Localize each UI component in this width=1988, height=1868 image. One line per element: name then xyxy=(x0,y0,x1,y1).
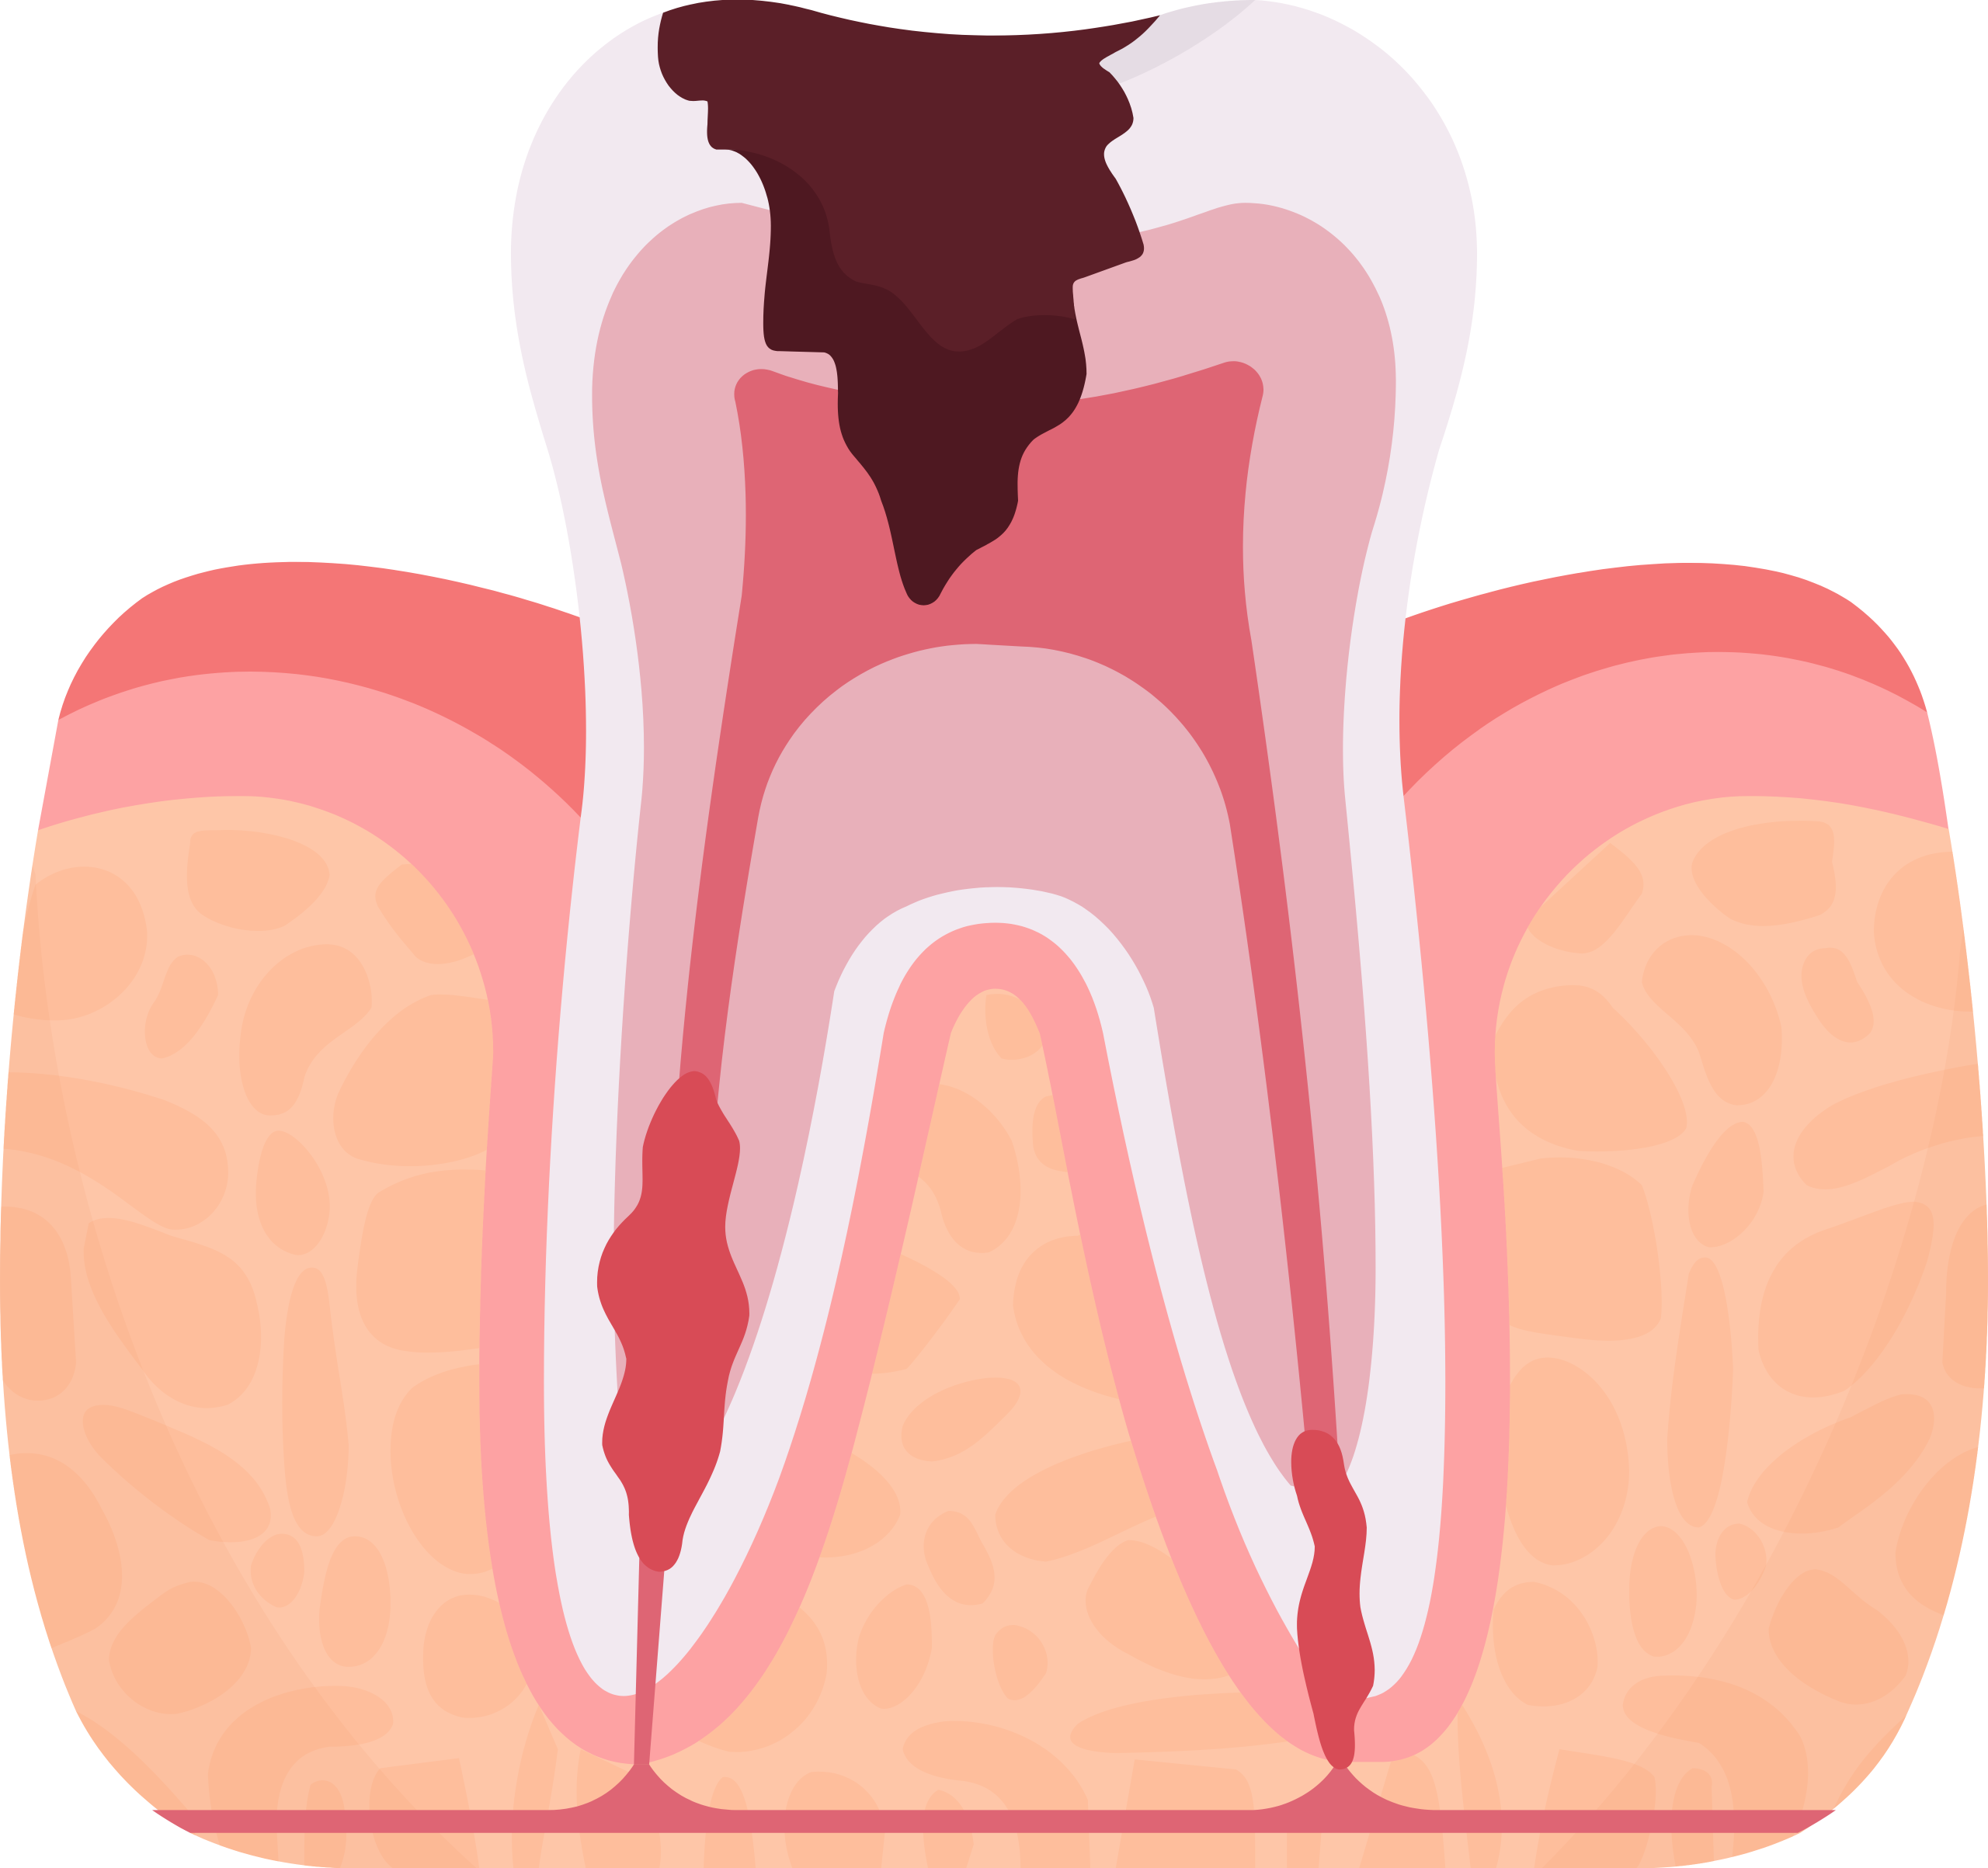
decay: upper cavity xyxy=(658,0,1160,352)
marrow blobs right xyxy=(1359,1749,1445,1868)
decay: deep dark layer xyxy=(725,150,1086,606)
gum: pink tissue and root sheath xyxy=(38,652,1948,1775)
jaw bone with marrow pattern xyxy=(0,761,1988,1868)
abscess: right root xyxy=(1291,1430,1375,1769)
enamel shadow highlight xyxy=(1084,0,1255,89)
abscess: left root xyxy=(597,1071,749,1571)
nerve canal to root tip xyxy=(634,1521,668,1765)
pulp chamber and root canals xyxy=(678,361,1337,1445)
tooth enamel and cementum xyxy=(511,0,1477,1705)
marrow blobs centre xyxy=(985,994,1042,1060)
nerve and blood vessel band xyxy=(152,1765,1836,1833)
gum: upper red gingiva xyxy=(58,562,1927,1014)
darker outer marrow shading xyxy=(2,866,304,1865)
marrow blobs left xyxy=(0,821,1988,1868)
dentin layer xyxy=(592,203,1396,1495)
